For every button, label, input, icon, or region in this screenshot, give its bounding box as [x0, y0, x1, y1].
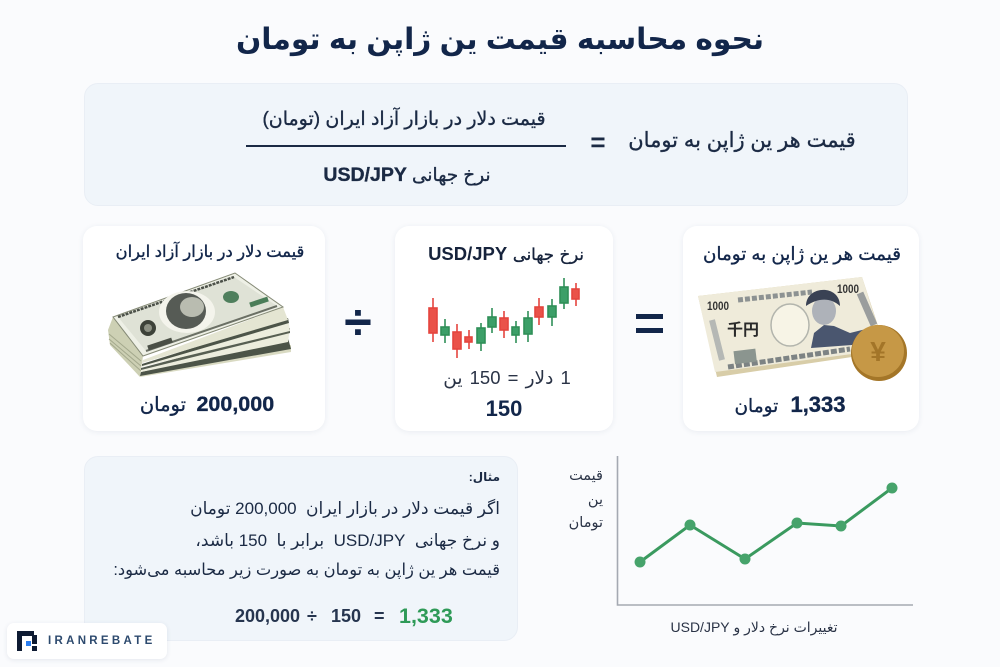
icon: yen banknote and coin: 1000 — [837, 284, 859, 296]
rate note: 1 دلار = 150 ین — [443, 367, 571, 388]
candlestick chart — [428, 278, 580, 358]
card heading: نرخ جهانی USD/JPY — [428, 243, 584, 264]
calculation: = — [374, 606, 385, 626]
icon: yen banknote and coin: ¥ — [870, 336, 886, 367]
example text line 2: و نرخ جهانی USD/JPY برابر با 150 باشد، — [195, 531, 500, 550]
panel: yen price card — [683, 226, 919, 431]
card value: 1,333 تومان — [734, 392, 846, 417]
formula result label: قیمت هر ین ژاپن به تومان — [628, 129, 856, 152]
calculation: ÷ — [307, 606, 317, 626]
example label: مثال: — [469, 470, 500, 484]
calculation: 1,333 — [399, 604, 453, 628]
formula denominator: نرخ جهانی USD/JPY — [323, 164, 491, 186]
icon: yen banknote and coin: 1000 — [707, 301, 729, 313]
card heading: قیمت هر ین ژاپن به تومان — [703, 243, 901, 264]
panel: dollar price card — [83, 226, 325, 431]
calculation: 150 — [331, 606, 361, 626]
chart y-axis label: ین — [588, 492, 603, 508]
chart y-axis label: قیمت — [569, 468, 603, 484]
example text line 3: قیمت هر ین ژاپن به تومان به صورت زیر محاسبه می‌شود: — [113, 561, 500, 579]
division sign: ÷ — [344, 294, 372, 350]
chart y-axis label — [569, 468, 603, 531]
card heading: قیمت دلار در بازار آزاد ایران — [116, 243, 304, 261]
equals sign: = — [590, 127, 606, 157]
formula numerator: قیمت دلار در بازار آزاد ایران (تومان) — [262, 109, 546, 130]
panel: formula — [84, 83, 908, 206]
card value: 150 — [486, 396, 522, 421]
icon: yen banknote and coin — [698, 277, 907, 381]
chart x-axis label: تغییرات نرخ دلار و USD/JPY — [670, 619, 837, 635]
logo wordmark: IRANREBATE — [48, 635, 156, 647]
panel: worked example — [84, 456, 518, 641]
fraction bar — [246, 145, 566, 147]
panel: USD/JPY rate card — [395, 226, 613, 431]
card value: 200,000 تومان — [140, 392, 274, 416]
icon: stack of dollars — [108, 272, 291, 377]
title: نحوه محاسبه قیمت ین ژاپن به تومان — [236, 23, 764, 56]
calculation: 200,000 — [235, 606, 300, 626]
chart y-axis label: تومان — [569, 515, 603, 531]
icon: logo mark — [17, 631, 37, 651]
calculation — [235, 604, 453, 628]
example text line 1: اگر قیمت دلار در بازار ایران 200,000 تومان — [190, 499, 500, 518]
logo: IranRebate — [7, 623, 167, 659]
icon: yen banknote and coin: 千円 — [727, 316, 759, 340]
equals sign between cards — [636, 314, 663, 333]
